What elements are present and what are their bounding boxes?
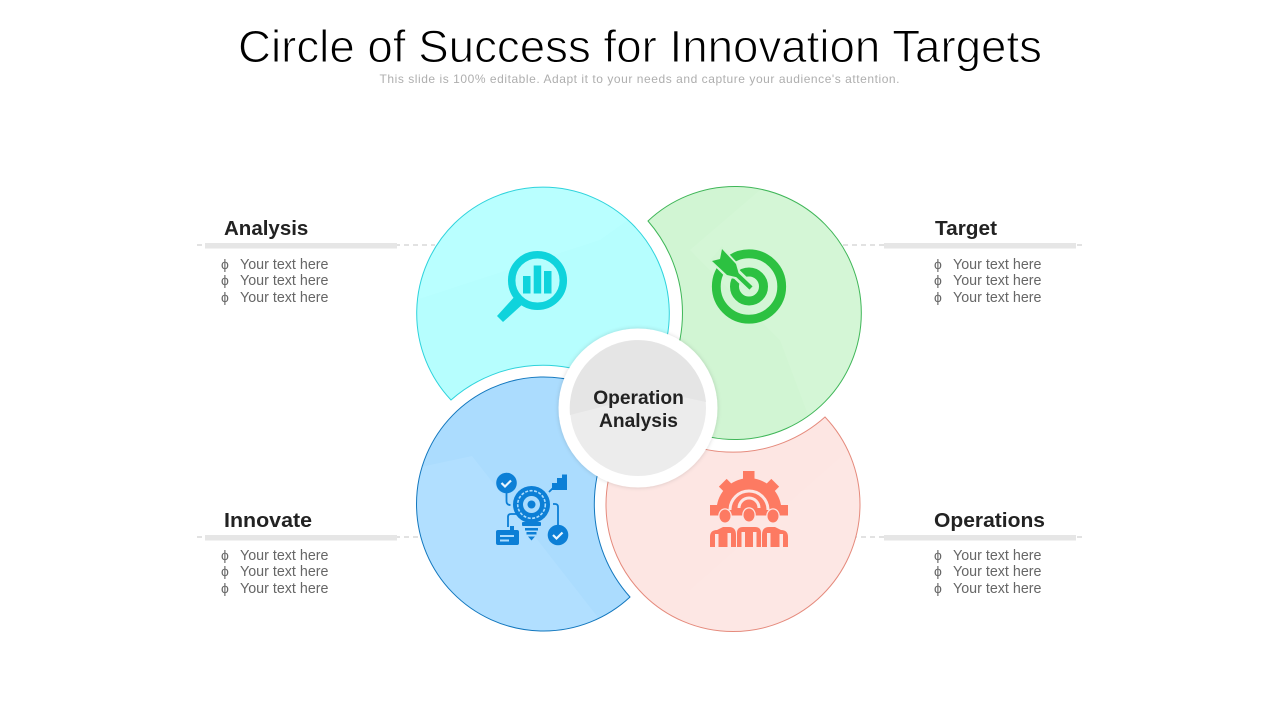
text block: target: ϕ [934, 256, 942, 272]
text block: analysis: Analysis [224, 217, 308, 240]
text block: operations: ϕ [934, 580, 942, 596]
text block: analysis: ϕ [221, 289, 229, 305]
text block: target: Target [935, 217, 997, 240]
panel: operations segment [606, 417, 870, 640]
panel: analysis segment [416, 186, 670, 401]
text block: innovate: Innovate [224, 509, 312, 532]
panel: target connector [843, 243, 1084, 248]
text block: analysis: ϕ [221, 272, 229, 288]
subtitle: This slide is 100% editable. Adapt it to your needs and capture your audience's attention. [380, 72, 900, 86]
icon: target with arrow [712, 249, 782, 319]
center circle: Analysis [599, 411, 678, 432]
text block: analysis [221, 217, 329, 306]
text block: innovate: ϕ [221, 580, 229, 596]
panel: target segment [648, 187, 870, 440]
text block: analysis: Your text here [240, 257, 329, 273]
text block: target [934, 217, 1042, 306]
panel: innovate connector [197, 535, 435, 540]
text block: target: ϕ [934, 289, 942, 305]
text block: target: Your text here [953, 290, 1042, 306]
icon: gear with team [710, 471, 788, 547]
text block: operations: Your text here [953, 548, 1042, 564]
icon: magnifier with bar chart [497, 255, 563, 322]
text block: operations: Your text here [953, 581, 1042, 597]
text block: target: Your text here [953, 257, 1042, 273]
panel: innovate segment [410, 377, 630, 640]
text block: operations: Your text here [953, 564, 1042, 580]
text block: operations: ϕ [934, 563, 942, 579]
text block: operations: Operations [934, 509, 1045, 532]
panel: analysis connector [197, 243, 435, 248]
title: Circle of Success for Innovation Targets [238, 21, 1042, 72]
text block: innovate: Your text here [240, 548, 329, 564]
text block: analysis: Your text here [240, 273, 329, 289]
text block: innovate: ϕ [221, 563, 229, 579]
icon: lightbulb with gear and checks [496, 473, 568, 545]
text block: target: ϕ [934, 272, 942, 288]
panel: operations connector [843, 535, 1084, 540]
text block: target: Your text here [953, 273, 1042, 289]
text block: analysis: Your text here [240, 290, 329, 306]
text block: operations: ϕ [934, 547, 942, 563]
text block: innovate: ϕ [221, 547, 229, 563]
text block: analysis: ϕ [221, 256, 229, 272]
center circle: Operation [593, 388, 684, 409]
text block: innovate [221, 509, 329, 597]
text block: innovate: Your text here [240, 564, 329, 580]
text block: innovate: Your text here [240, 581, 329, 597]
center circle [558, 328, 718, 488]
text block: operations [934, 509, 1045, 597]
